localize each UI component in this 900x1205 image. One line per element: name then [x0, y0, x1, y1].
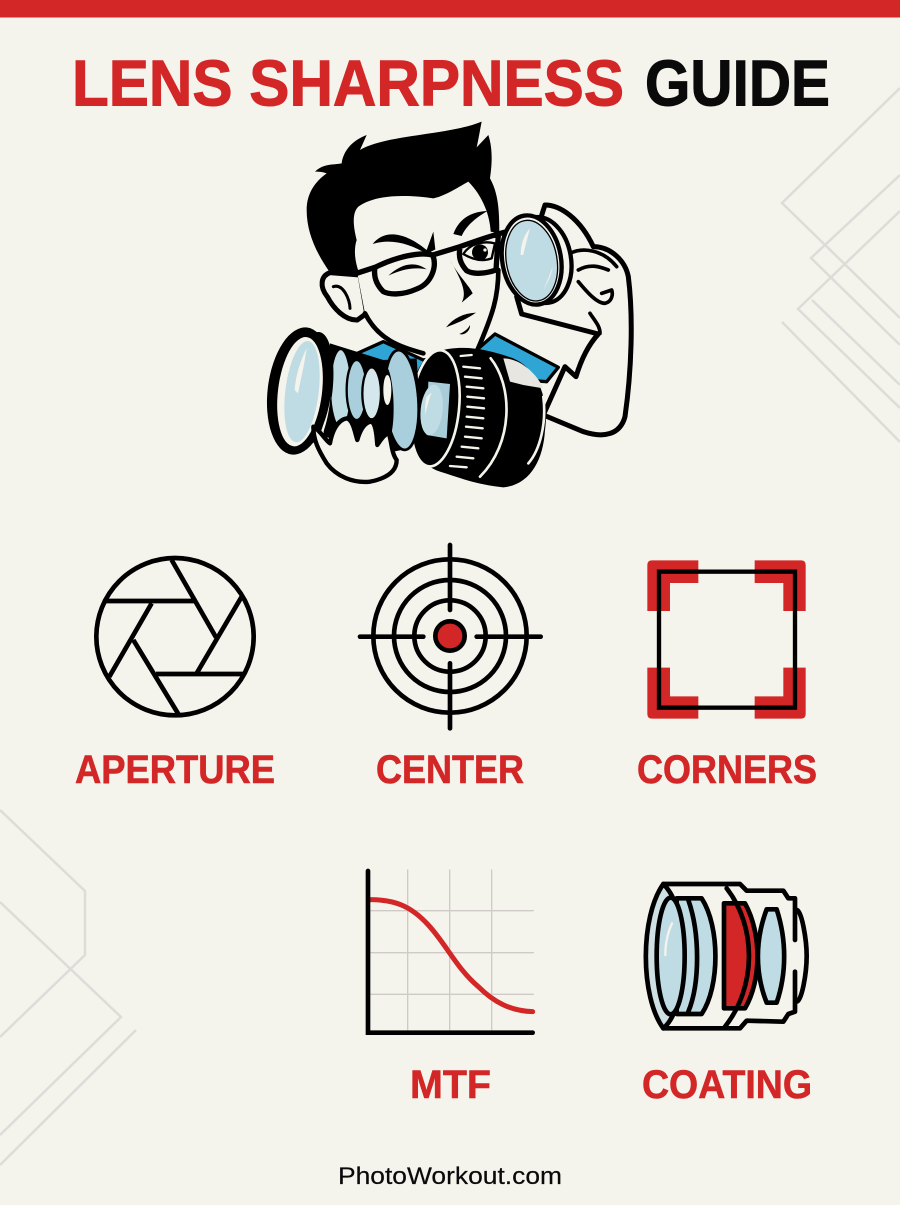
- illustration: photographer inspecting lens: [260, 122, 631, 487]
- glasses: [357, 232, 507, 294]
- label: aperture: APERTURE: [75, 748, 275, 792]
- top red bar: [0, 0, 900, 18]
- title: LENS SHARPNESS: [72, 46, 624, 120]
- label: coating: COATING: [642, 1063, 812, 1107]
- filter lens held in hand: [495, 211, 578, 309]
- title: GUIDE: [645, 46, 830, 120]
- footer: PhotoWorkout.com: [338, 1163, 562, 1190]
- eyebrows: [373, 211, 487, 254]
- MTF chart icon: [368, 870, 533, 1033]
- label: center: CENTER: [376, 748, 524, 792]
- label: mtf: MTF: [410, 1063, 491, 1107]
- hair: [307, 122, 499, 275]
- nose and mouth: [446, 260, 476, 334]
- coating lens cross-section icon: [646, 884, 807, 1028]
- right lens barrel: [405, 348, 546, 487]
- label: corners: CORNERS: [637, 748, 817, 792]
- aperture icon: [96, 558, 254, 715]
- face: [357, 183, 499, 353]
- center target icon: [360, 545, 541, 728]
- corners icon: [647, 560, 806, 719]
- ear: [322, 273, 367, 320]
- eyes: [388, 242, 495, 276]
- lower hand holding lenses: [313, 418, 397, 482]
- left lens barrel: [260, 324, 422, 458]
- t-shirt: [350, 334, 558, 382]
- arm and hand: [517, 205, 631, 435]
